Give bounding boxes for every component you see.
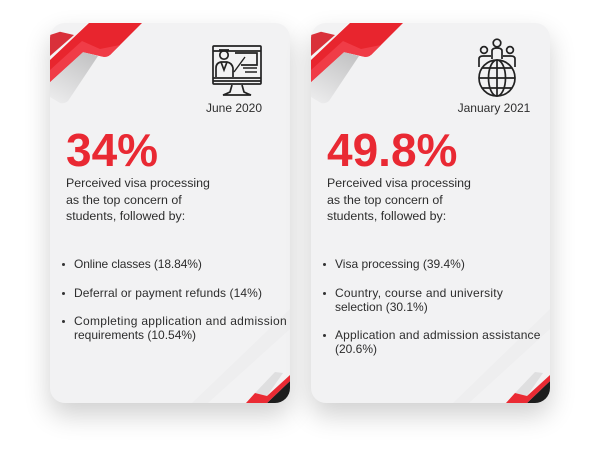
decorative corner ribbons — [50, 23, 290, 403]
bullet: completing application — [74, 314, 287, 343]
bullet: application and admission — [335, 328, 541, 357]
bullet: completing application: Completing application and admission — [74, 314, 287, 328]
bullet: deferral: Deferral or payment refunds (14%) — [74, 286, 262, 300]
panel: January 2021 card — [311, 23, 550, 403]
bullet: application and admission: (20.6%) — [335, 342, 377, 356]
bullet: country, course and university: Country, course and university — [335, 286, 503, 300]
bullet: completing application: requirements (10.54%) — [74, 328, 196, 342]
lead text — [327, 176, 471, 223]
bullet: country, course and university: selection (30.1%) — [335, 300, 428, 314]
icon: online teacher on monitor — [212, 45, 262, 96]
bullet: country, course and university — [335, 286, 503, 314]
lead text: students, followed by: — [66, 209, 185, 223]
bullet: application and admission: Application and admission assistance — [335, 328, 541, 342]
lead text: students, followed by: — [327, 209, 446, 223]
big percentage: 34% — [66, 124, 158, 176]
decorative corner ribbons — [311, 23, 550, 403]
lead text: as the top concern of — [327, 192, 443, 206]
lead text: Perceived visa processing — [327, 176, 471, 190]
panel: June 2020 card — [50, 23, 290, 403]
lead text: as the top concern of — [66, 192, 182, 206]
lead text — [66, 176, 210, 223]
date label: January 2021 — [458, 101, 530, 115]
date label: June 2020 — [206, 101, 262, 115]
lead text: Perceived visa processing — [66, 176, 210, 190]
bullet: online classes: Online classes (18.84%) — [74, 257, 202, 271]
big percentage: 49.8% — [327, 124, 457, 176]
bullet: visa processing: Visa processing (39.4%) — [335, 257, 465, 271]
icon: people around a globe — [478, 38, 516, 97]
